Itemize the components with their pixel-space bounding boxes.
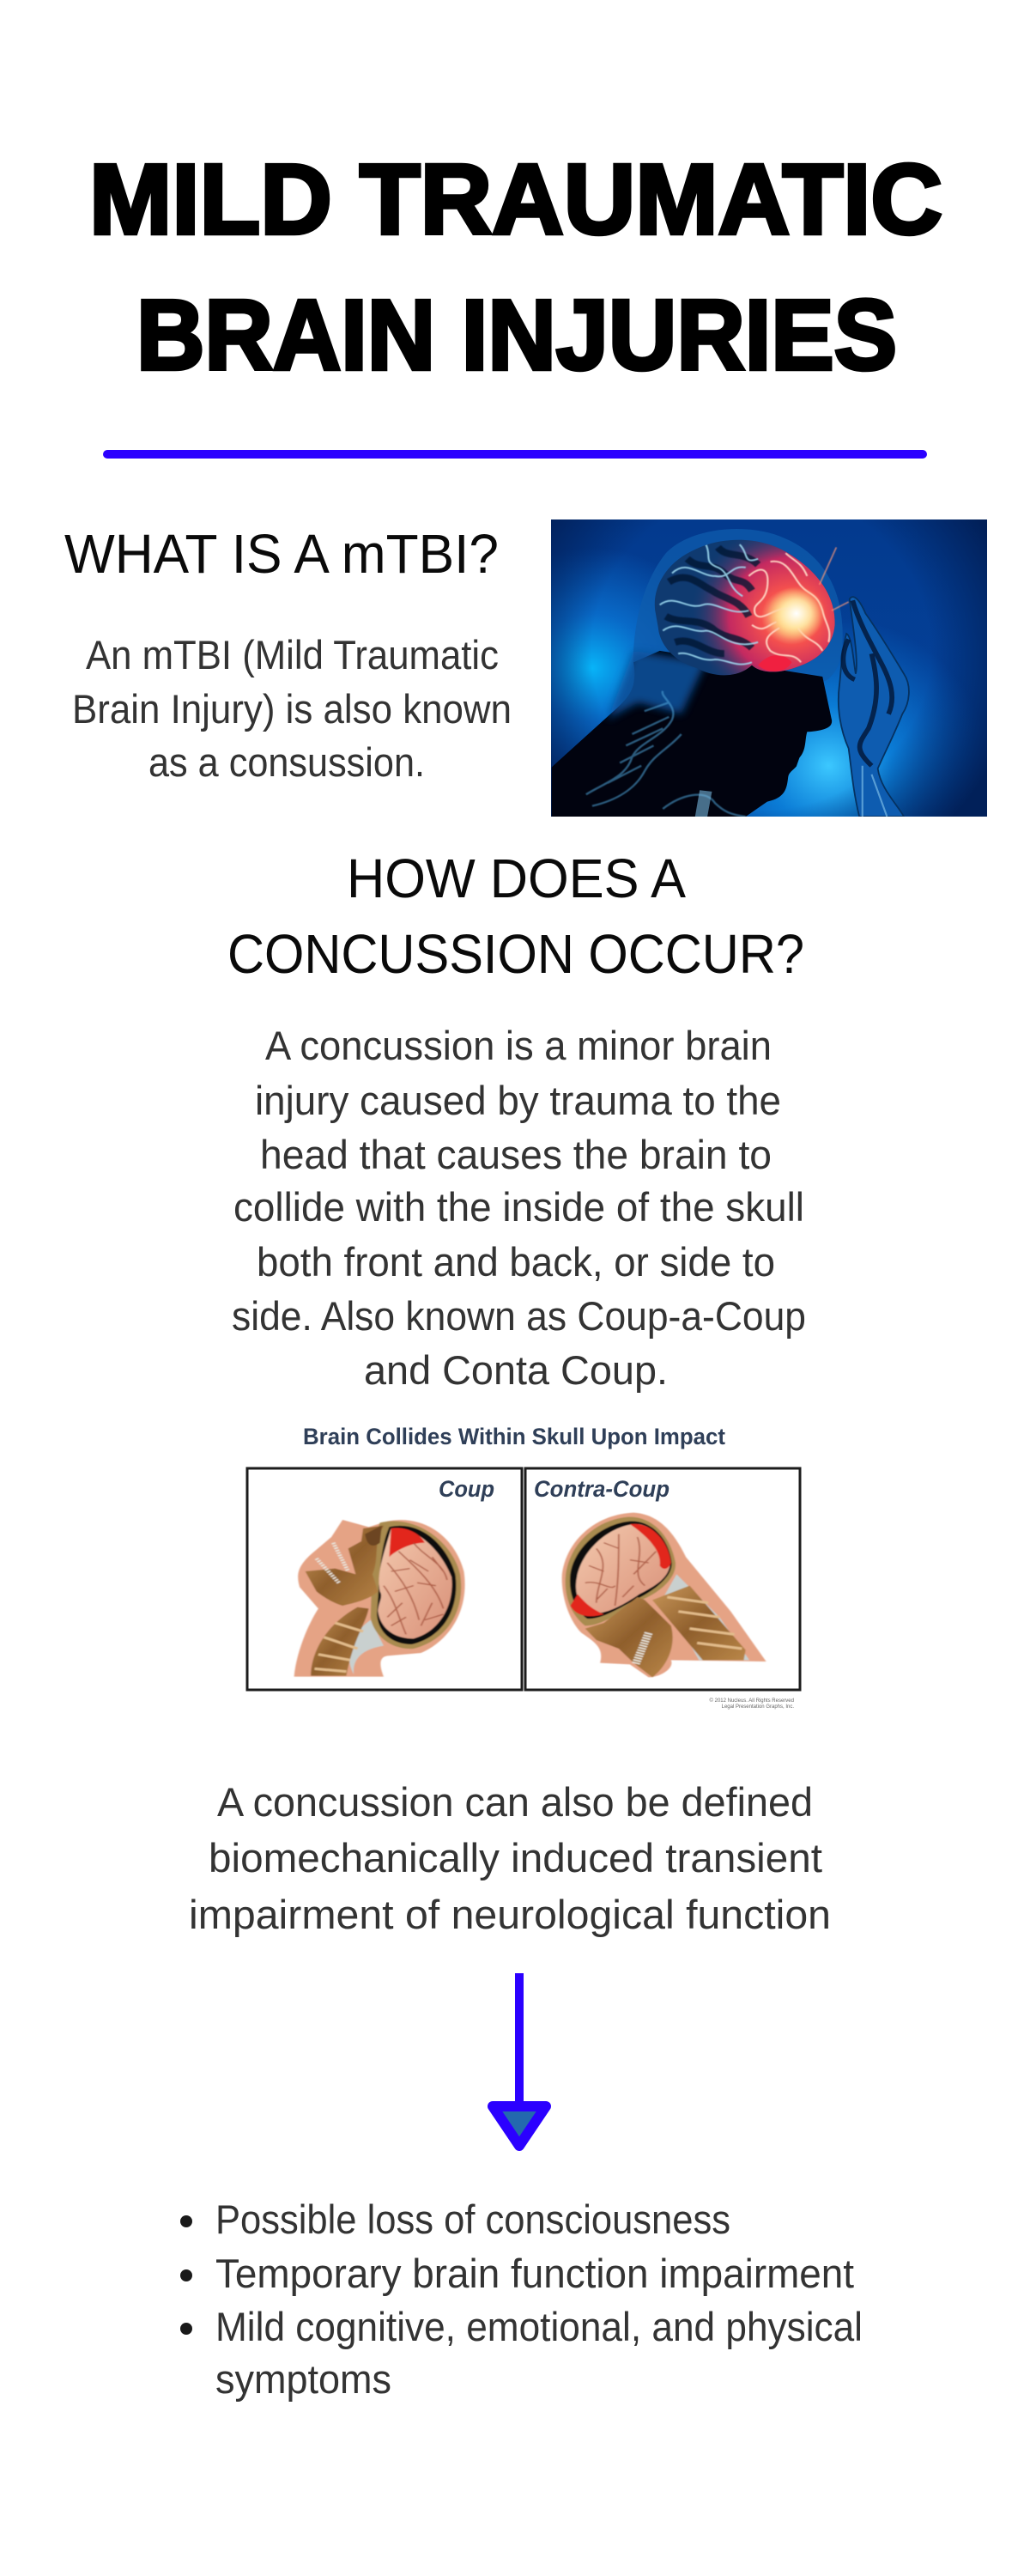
bullet list: symptoms bbox=[180, 2196, 863, 2402]
heading: what is a mTBI: WHAT IS A mTBI? bbox=[64, 523, 499, 585]
diagram title: Brain Collides Within Skull Upon Impact bbox=[303, 1424, 725, 1449]
text block: concussion explanation: A concussion is a minor brain bbox=[265, 1023, 772, 1068]
diagram: coup and contra-coup bbox=[247, 1424, 800, 1710]
text block: concussion explanation: collide with the inside of the skull bbox=[233, 1184, 804, 1230]
text block: biomechanical definition: A concussion can also be defined bbox=[217, 1779, 813, 1825]
text block: concussion explanation bbox=[232, 1023, 806, 1393]
heading: how does a concussion occur: HOW DOES A bbox=[347, 848, 686, 909]
text block: mTBI definition: An mTBI (Mild Traumatic bbox=[86, 632, 499, 677]
heading: how does a concussion occur: CONCUSSION OCCUR? bbox=[227, 923, 804, 985]
text block: concussion explanation: and Conta Coup. bbox=[364, 1347, 668, 1393]
text block: concussion explanation: both front and back, or side to bbox=[257, 1239, 775, 1285]
text block: mTBI definition: Brain Injury) is also known bbox=[72, 686, 512, 732]
bullet: loss of consciousness: Possible loss of consciousness bbox=[215, 2196, 730, 2242]
text block: concussion explanation: side. Also known as Coup-a-Coup bbox=[232, 1293, 806, 1339]
bullet: symptoms: symptoms bbox=[215, 2356, 391, 2402]
heading: how does a concussion occur bbox=[227, 848, 804, 985]
copyright note: Legal Presentation Graphs, Inc. bbox=[722, 1704, 794, 1710]
bullet: symptoms: Mild cognitive, emotional, and physical bbox=[215, 2304, 863, 2349]
copyright note bbox=[710, 1698, 794, 1710]
text block: biomechanical definition: impairment of neurological function bbox=[189, 1892, 831, 1937]
title: MILD TRAUMATIC bbox=[89, 143, 942, 255]
bullet: symptoms bbox=[180, 2304, 863, 2402]
illustration: glowing brain in a head profile bbox=[551, 519, 987, 817]
title bbox=[89, 143, 942, 391]
text block: mTBI definition bbox=[72, 632, 512, 785]
text block: concussion explanation: injury caused by trauma to the bbox=[255, 1078, 781, 1123]
title: BRAIN INJURIES bbox=[136, 279, 897, 391]
arrow: down bbox=[493, 1973, 546, 2146]
label: contra-coup: Contra-Coup bbox=[534, 1476, 670, 1502]
title underline bbox=[103, 450, 927, 459]
text block: mTBI definition: as a consussion. bbox=[148, 739, 425, 785]
panel: contra-coup bbox=[525, 1468, 800, 1690]
text block: biomechanical definition bbox=[189, 1779, 831, 1937]
text block: concussion explanation: head that causes the brain to bbox=[260, 1132, 772, 1177]
bullet: brain function impairment: Temporary brain function impairment bbox=[215, 2251, 854, 2296]
label: coup: Coup bbox=[439, 1476, 494, 1502]
copyright note: © 2012 Nucleus. All Rights Reserved bbox=[710, 1698, 794, 1704]
panel: coup bbox=[247, 1468, 522, 1690]
text block: biomechanical definition: biomechanically induced transient bbox=[209, 1835, 822, 1880]
